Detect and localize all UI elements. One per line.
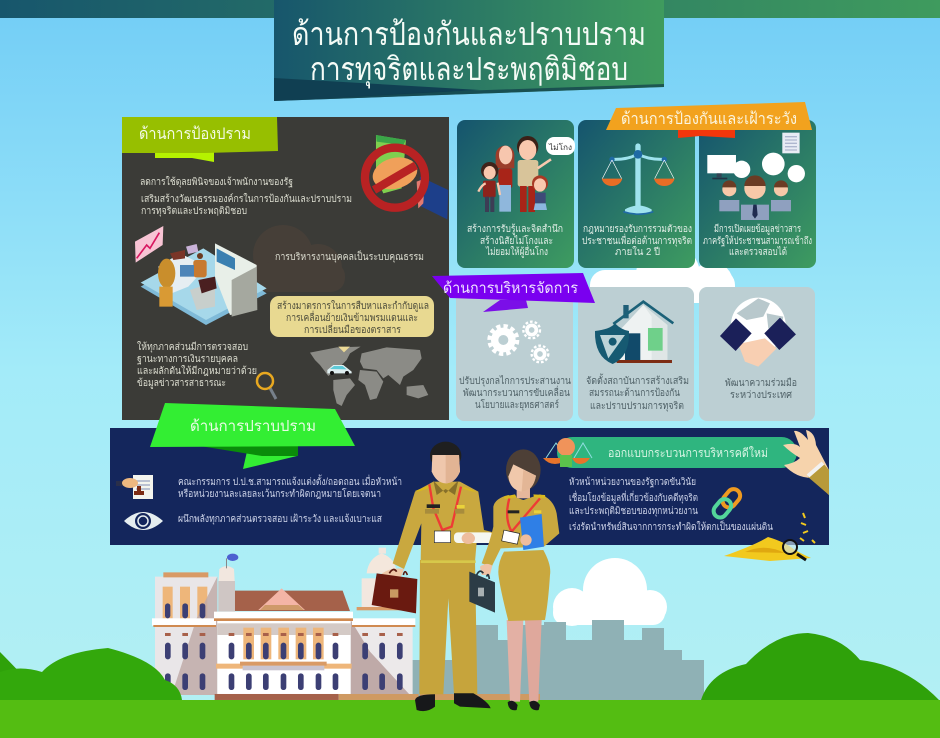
central roof: [235, 591, 350, 611]
ribbon: suppression heading: [150, 403, 355, 469]
title block: [274, 0, 664, 101]
icon: eye: [124, 512, 163, 530]
text: mechanisms: นโยบายและยุทธศาสตร์: [475, 398, 560, 411]
text: legal: ภายใน 2 ปี: [615, 246, 660, 258]
icon: chain link: [711, 486, 743, 520]
icon: gears: [489, 322, 548, 362]
text: case management: [569, 476, 773, 533]
text: cooperation: ระหว่างประเทศ: [730, 390, 793, 401]
icon: gold pile: [724, 513, 815, 561]
top banner strip: [0, 0, 940, 18]
text: deterrence measures: ลดการใช้ดุลยพินิจของเจ้าพนักงานของรัฐ: [140, 176, 293, 188]
callout: monitoring measures: สร้างมาตรการในการสืบหาและกำกับดูแล: [277, 300, 429, 312]
male briefcase: [372, 570, 417, 613]
card: disclosure: [699, 120, 816, 268]
cloud behind cards: [590, 243, 735, 307]
city skyline: [412, 620, 704, 700]
speech bubble: ไม่โกง: [548, 142, 572, 152]
text: disclosure: มีการเปิดเผยข้อมูลข่าวสาร: [714, 223, 801, 235]
text: case management: หัวหน้าหน่วยงานของรัฐกวดขันวินัย: [569, 476, 696, 488]
text: cooperation: [725, 377, 797, 401]
dome: [367, 553, 397, 573]
text: institute: [586, 373, 689, 412]
text: awareness: สร้างนิสัยไม่โกงและ: [480, 234, 553, 247]
text: case management: เชื่อมโยงข้อมูลที่เกี่ยวข้องกับคดีทุจริต: [569, 490, 698, 504]
female briefcase: [469, 571, 495, 613]
text: disclosure: และตรวจสอบได้: [729, 246, 787, 258]
icon: house and shield: [595, 302, 673, 364]
building: government house: [152, 548, 419, 700]
callout: monitoring measures: [270, 296, 434, 337]
panel: deterrence: [122, 117, 449, 420]
text: mechanisms: [459, 375, 571, 411]
text: awareness: สร้างการรับรู้และจิตสำนึก: [467, 223, 563, 235]
hills: left: [0, 648, 182, 700]
card: mechanisms: [456, 287, 573, 421]
ground: [0, 700, 940, 738]
text: asset disclosure: [137, 341, 257, 389]
text: asset disclosure: ข้อมูลข่าวสารสาธารณะ: [137, 377, 226, 389]
icon: scales and person: [543, 438, 592, 467]
text: merit system: การบริหารงานบุคคลเป็นระบบคุณธรรม: [275, 249, 424, 263]
figure: male officer: [372, 442, 493, 711]
text: awareness: [467, 223, 563, 258]
ribbon: deterrence heading: [122, 117, 278, 162]
ribbon: management heading: ด้านการบริหารจัดการ: [443, 280, 578, 297]
text: asset disclosure: ฐานะทางการเงินรายบุคคล: [137, 354, 238, 365]
text: commission powers: คณะกรรมการ ป.ป.ช.สามารถแจ้งแต่งตั้ง/ถอดถอน เมื่อหัวหน้า: [178, 474, 402, 488]
central block: [214, 612, 353, 620]
title text: ด้านการป้องกันและปราบปราม: [292, 16, 646, 52]
card: cooperation: [699, 287, 815, 421]
card: institute: [578, 287, 694, 421]
text: mechanisms: พัฒนากระบวนการขับเคลื่อน: [463, 385, 570, 399]
windows: [165, 603, 403, 690]
text: asset disclosure: ให้ทุกภาคส่วนมีการตรวจสอบ: [137, 341, 248, 353]
text: legal: [582, 224, 692, 258]
icon: magnifier on gold: [783, 540, 806, 560]
shadow cloud behind text: [253, 225, 345, 292]
icon: no bribery: [365, 135, 448, 219]
icon: globe handshake: [720, 298, 796, 367]
hills: right: [701, 633, 939, 700]
text: awareness: ไม่ยอมให้ผู้อื่นโกง: [485, 244, 548, 258]
text: deterrence measures: [140, 176, 352, 217]
figure: female officer: [469, 449, 559, 710]
card: awareness: [457, 120, 575, 268]
left wing: [155, 577, 217, 695]
icon: document stamp: [116, 475, 153, 499]
text: mechanisms: ปรับปรุงกลไกการประสานงาน: [459, 375, 571, 387]
text: asset disclosure: และผลักดันให้มีกฎหมายว่าด้วย: [137, 365, 257, 377]
ribbon: suppression heading: ด้านการปราบปราม: [190, 418, 316, 435]
ribbon: deterrence heading: ด้านการป้องปราม: [139, 125, 251, 143]
text: institute: จัดตั้งสถาบันการสร้างเสริม: [586, 373, 689, 387]
icon: magnifier: [257, 373, 276, 399]
text: commission powers: [178, 474, 402, 500]
text: commission powers: หรือหน่วยงานละเลยละเว้นกระทำผิดกฎหมายโดยเจตนา: [178, 487, 381, 500]
panel: suppression: [110, 403, 829, 545]
text: disclosure: ภาครัฐให้ประชาชนสามารถเข้าถึง: [703, 235, 812, 247]
icon: scales: [602, 143, 675, 214]
icon: family: [478, 136, 551, 212]
callout: monitoring measures: การเปลี่ยนมือของตราสาร: [304, 322, 402, 336]
icon: office scene: [135, 226, 267, 325]
tower: [218, 581, 235, 612]
text: legal: กฎหมายรองรับการรวมตัวของ: [583, 224, 692, 235]
ribbon: prevention heading: ด้านการป้องกันและเฝ้าระวัง: [621, 110, 797, 128]
cloud: right of figures: [553, 558, 667, 626]
icon: people and speech bubbles: [707, 133, 805, 220]
text: disclosure: [703, 223, 812, 258]
speech bubble: [546, 137, 575, 155]
tan plinth: [420, 694, 540, 700]
text: deterrence measures: การทุจริตและประพฤติมิชอบ: [141, 206, 247, 217]
ribbon: prevention heading: [606, 102, 812, 138]
text: case management: เร่งรัดนำทรัพย์สินจากการกระทำผิดให้ตกเป็นของแผ่นดิน: [569, 519, 773, 533]
text: oversight: ผนึกพลังทุกภาคส่วนตรวจสอบ เฝ้าระวัง และแจ้งเบาะแส: [178, 513, 382, 525]
world map with car: [310, 347, 428, 406]
text: institute: และปราบปรามการทุจริต: [590, 401, 684, 412]
panel: prevention cards: [457, 102, 816, 268]
lintels: [165, 633, 403, 636]
text: deterrence measures: เสริมสร้างวัฒนธรรมองค์กรในการป้องกันและปราบปราม: [141, 193, 352, 205]
card: legal: [578, 120, 695, 268]
pill: new case management: [557, 437, 797, 468]
ribbon: management heading: [432, 273, 595, 312]
title text: การทุจริตและประพฤติมิชอบ: [310, 51, 628, 89]
text: legal: ประชาชนเพื่อต่อต้านการทุจริต: [582, 233, 692, 247]
text: cooperation: พัฒนาความร่วมมือ: [725, 377, 797, 389]
icon: hand: [783, 430, 829, 495]
pill: new case management: ออกแบบกระบวนการบริหารคดีใหม่: [608, 446, 768, 460]
right wing: [351, 620, 413, 695]
panel: management cards: [432, 273, 815, 421]
text: case management: และประพฤติมิชอบของทุกหน่วยงาน: [569, 506, 698, 517]
text: institute: สมรรถนะด้านการป้องกัน: [589, 387, 680, 399]
callout: monitoring measures: การเคลื่อนย้ายเงินข้ามพรมแดนและ: [286, 310, 418, 324]
